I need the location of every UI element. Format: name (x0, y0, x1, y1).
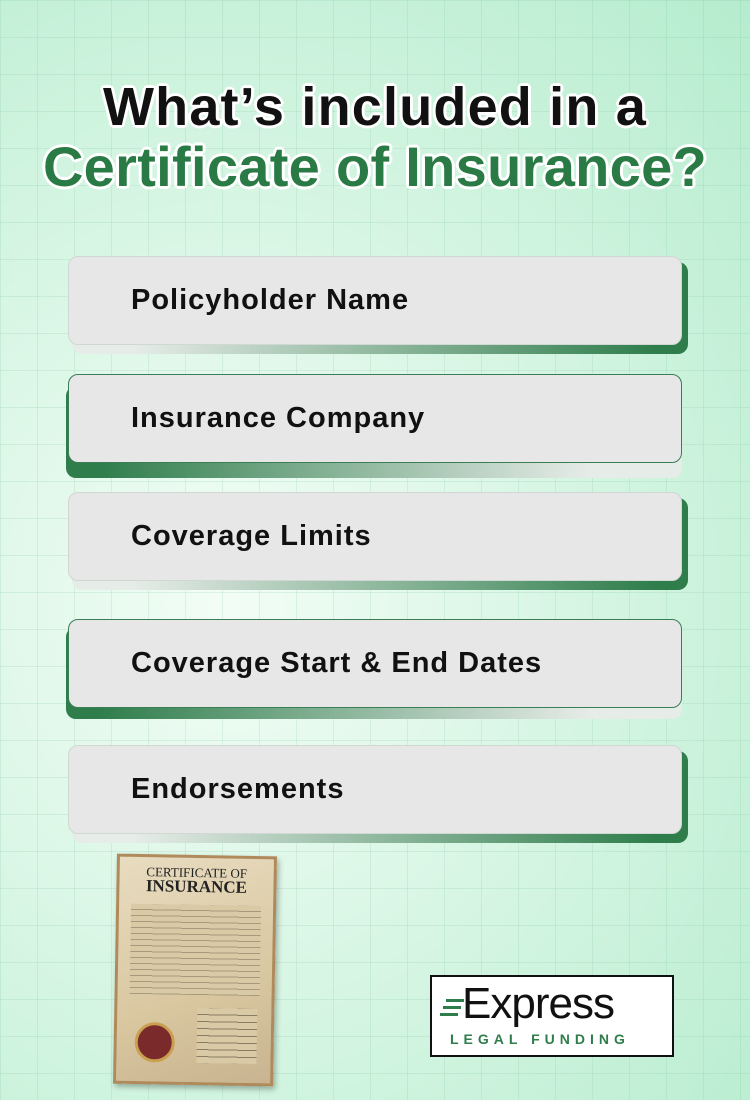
card: endorsements: Endorsements (131, 773, 344, 805)
logo: Express Legal Funding: Express (462, 979, 614, 1028)
title: Certificate of Insurance? (43, 135, 707, 198)
certificate image (113, 854, 277, 1086)
title: What’s included in a (103, 77, 647, 137)
certificate image: INSURANCE (146, 876, 247, 897)
card: insurance company (66, 374, 682, 478)
card: insurance company: Insurance Company (131, 402, 425, 434)
card: coverage limits: Coverage Limits (131, 520, 372, 552)
certificate image: CERTIFICATE OF (146, 864, 247, 881)
logo: Express Legal Funding: LEGAL FUNDING (450, 1031, 630, 1047)
card: coverage dates (66, 619, 682, 719)
card: coverage limits (68, 492, 688, 590)
card: endorsements (68, 745, 688, 843)
title (42, 77, 707, 198)
card: coverage dates: Coverage Start & End Dates (131, 647, 542, 679)
card: policyholder name (68, 256, 688, 354)
logo: Express Legal Funding (430, 975, 674, 1057)
card: policyholder name: Policyholder Name (131, 284, 409, 316)
